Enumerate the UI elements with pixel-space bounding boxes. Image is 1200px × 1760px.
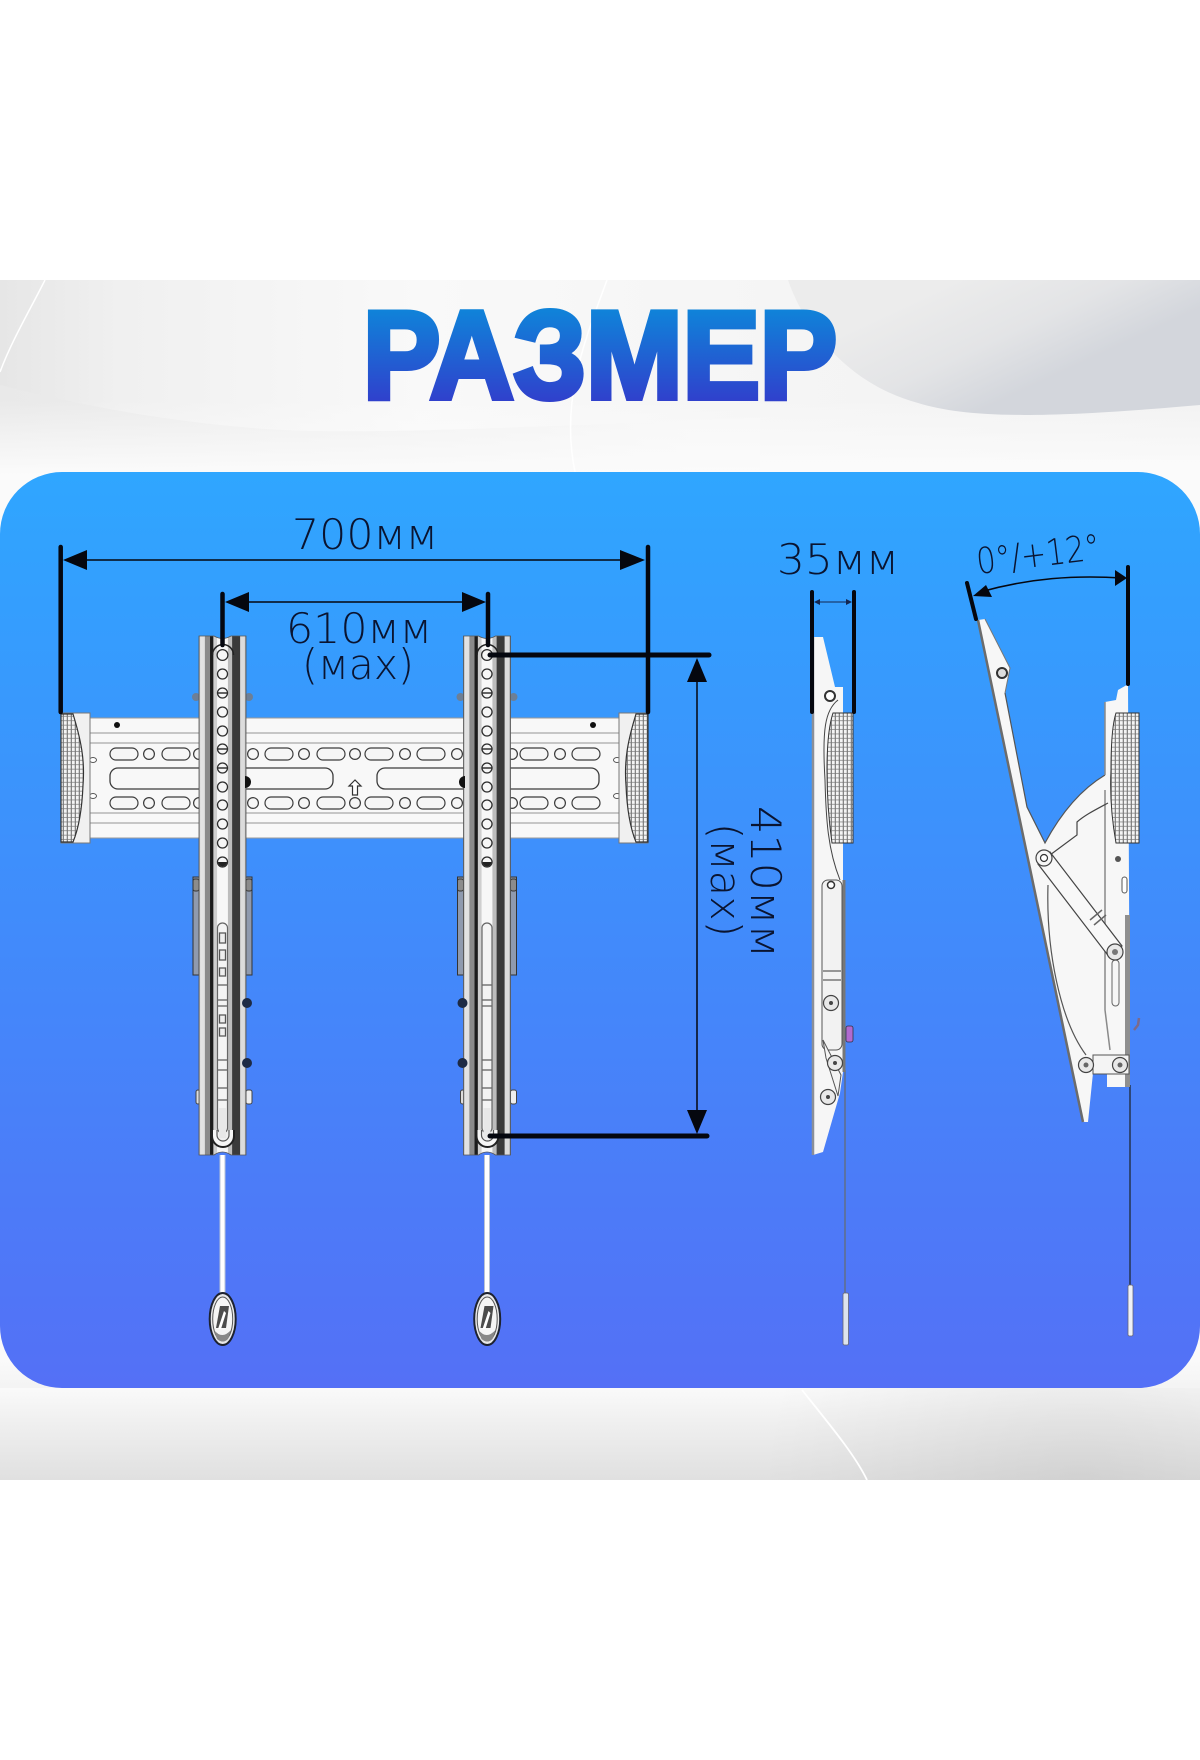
label: max rotated: (мах) <box>701 823 750 937</box>
left end cap with grip <box>61 713 90 843</box>
label: 35 mm: 35мм <box>777 535 899 584</box>
dimension: 35 mm depth <box>777 535 899 712</box>
dimension: 700 mm width <box>61 510 648 712</box>
grip mesh <box>827 713 853 843</box>
dimension: tilt angle <box>967 527 1128 684</box>
drawing: slim side view of mount <box>813 637 853 1345</box>
label: 410 mm: 410мм <box>741 806 790 958</box>
dimension: 610 mm spacing <box>222 592 488 689</box>
label: tilt range: 0°/+12° <box>974 527 1102 583</box>
bottom link <box>1093 1055 1129 1074</box>
right end cap with grip <box>619 713 648 843</box>
title: РАЗМЕР <box>363 287 837 425</box>
drawing: tilted side view of mount <box>978 619 1139 1336</box>
wall plate crossbar <box>88 718 622 838</box>
panel: blue dimensions panel <box>0 472 1200 1388</box>
strut <box>1038 852 1122 958</box>
background: grey abstract band <box>0 280 1200 1480</box>
label: 610 mm: 610мм <box>286 604 432 653</box>
black bolts behind rails <box>245 776 465 788</box>
label: max: (мах) <box>302 640 414 689</box>
label: 700 mm: 700мм <box>292 510 438 559</box>
drawing: front view of mount <box>61 636 648 1345</box>
left vertical rail with pull cord <box>192 636 253 1345</box>
wall plate and body silhouette <box>978 619 1130 1122</box>
right vertical rail with pull cord <box>456 636 518 1345</box>
grip mesh <box>1111 713 1139 843</box>
dimension: 410 mm height <box>490 655 790 1136</box>
